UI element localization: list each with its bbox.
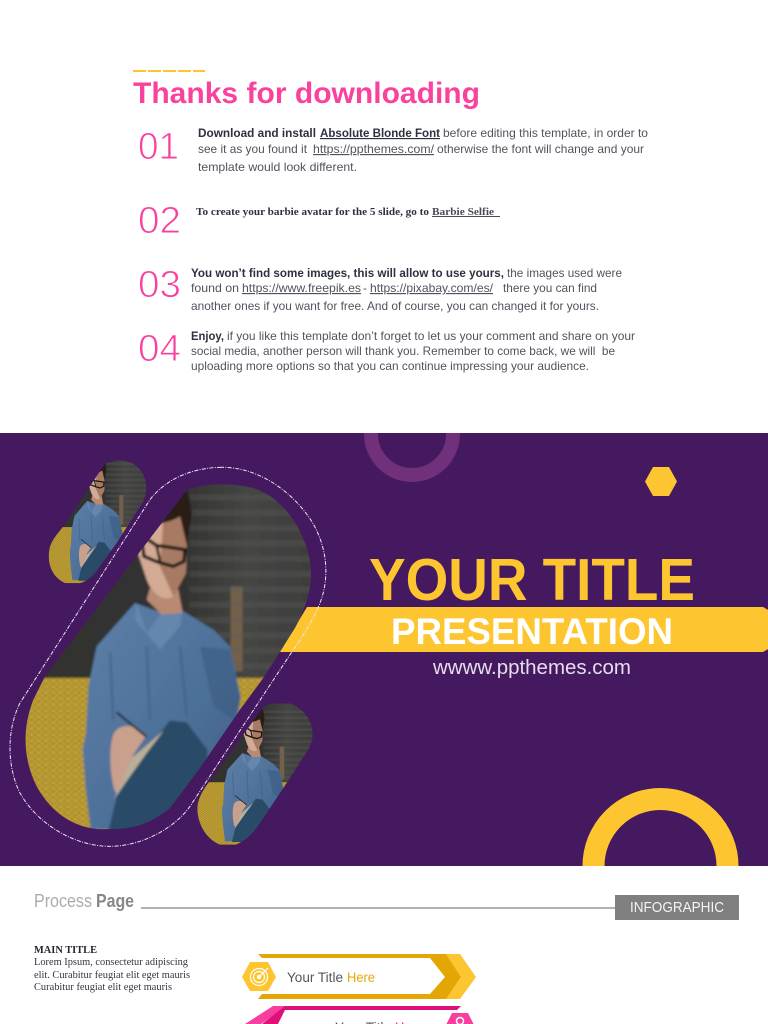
text block: main title: elit. Curabitur feugiat elit eget mauris bbox=[34, 970, 190, 981]
text block: main title: MAIN TITLE bbox=[34, 945, 97, 956]
step 01: https://ppthemes.com/ bbox=[313, 143, 435, 156]
icon: pink hexagon bbox=[445, 1013, 475, 1024]
icon: target hexagon bbox=[242, 962, 276, 991]
text block: main title: Curabitur feugiat elit eget mauris bbox=[34, 982, 172, 993]
panel: purple title slide bbox=[0, 433, 768, 866]
text block: main title bbox=[34, 945, 190, 993]
dashed outline bbox=[10, 467, 326, 846]
step 01: otherwise the font will change and your bbox=[437, 143, 644, 156]
step 04 bbox=[138, 328, 635, 373]
step 02: To create your barbie avatar for the 5 slide, go to bbox=[196, 206, 430, 218]
step 01 bbox=[138, 126, 648, 174]
infographic tag bbox=[615, 895, 739, 920]
main photo bbox=[26, 484, 311, 830]
step 01: before editing this template, in order to bbox=[443, 127, 648, 140]
step 04: uploading more options so that you can continue impressing your audience. bbox=[191, 360, 589, 373]
step 01: see it as you found it bbox=[198, 143, 308, 156]
step 01: Download and install bbox=[198, 127, 316, 140]
step 03: You won’t find some images, this will allow to use yours, bbox=[191, 267, 504, 280]
step 01: 01 bbox=[138, 126, 179, 168]
step 04: if you like this template don’t forget to let us your comment and share on your bbox=[227, 330, 635, 343]
step 03: - bbox=[363, 282, 367, 295]
step 03: the images used were bbox=[507, 267, 622, 280]
step 01: template would look different. bbox=[198, 161, 357, 174]
step 03 bbox=[138, 264, 622, 313]
process arrow: pink step bbox=[245, 1006, 475, 1024]
step 03: there you can find bbox=[503, 282, 597, 295]
yellow ribbon bbox=[280, 607, 768, 652]
section heading: process page: INFOGRAPHIC bbox=[630, 899, 724, 916]
section heading: process page: Process bbox=[34, 891, 92, 911]
step 02: 02 bbox=[138, 200, 181, 242]
text block: main title: Lorem Ipsum, consectetur adipiscing bbox=[34, 957, 189, 968]
step 03: another ones if you want for free. And of course, you can changed it for yours. bbox=[191, 300, 599, 313]
decorative ring top bbox=[364, 433, 460, 482]
step 03: found on bbox=[191, 282, 239, 295]
ribbon text: PRESENTATION bbox=[391, 611, 673, 652]
title: thanks for downloading: Thanks for downloading bbox=[133, 77, 480, 110]
step 01: Absolute Blonde Font bbox=[320, 127, 440, 140]
step 04: 04 bbox=[138, 328, 181, 370]
step 04: Enjoy, bbox=[191, 330, 224, 343]
process arrow: yellow step bbox=[242, 954, 476, 999]
small photo bottom bbox=[196, 704, 316, 845]
process arrow: yellow step: Here bbox=[347, 970, 375, 985]
section heading: process page bbox=[34, 891, 739, 920]
photo pills bbox=[10, 456, 326, 846]
step label: Your Title bbox=[287, 970, 343, 985]
section heading: process page: Page bbox=[96, 891, 134, 911]
step 03: https://www.freepik.es bbox=[242, 282, 361, 295]
hexagon accent bbox=[645, 467, 677, 496]
step 02: Barbie Selfie bbox=[432, 206, 494, 218]
ring bottom bbox=[582, 788, 738, 866]
step 04: social media, another person will thank you. Remember to come back, we will be bbox=[191, 345, 615, 358]
step 03: 03 bbox=[138, 264, 181, 306]
main title: YOUR TITLE bbox=[369, 547, 695, 613]
heading accent dashes bbox=[133, 70, 205, 72]
step 02 bbox=[138, 200, 500, 242]
small photo top bbox=[48, 456, 150, 583]
website: wwww.ppthemes.com bbox=[432, 657, 631, 679]
step 03: https://pixabay.com/es/ bbox=[370, 282, 494, 295]
